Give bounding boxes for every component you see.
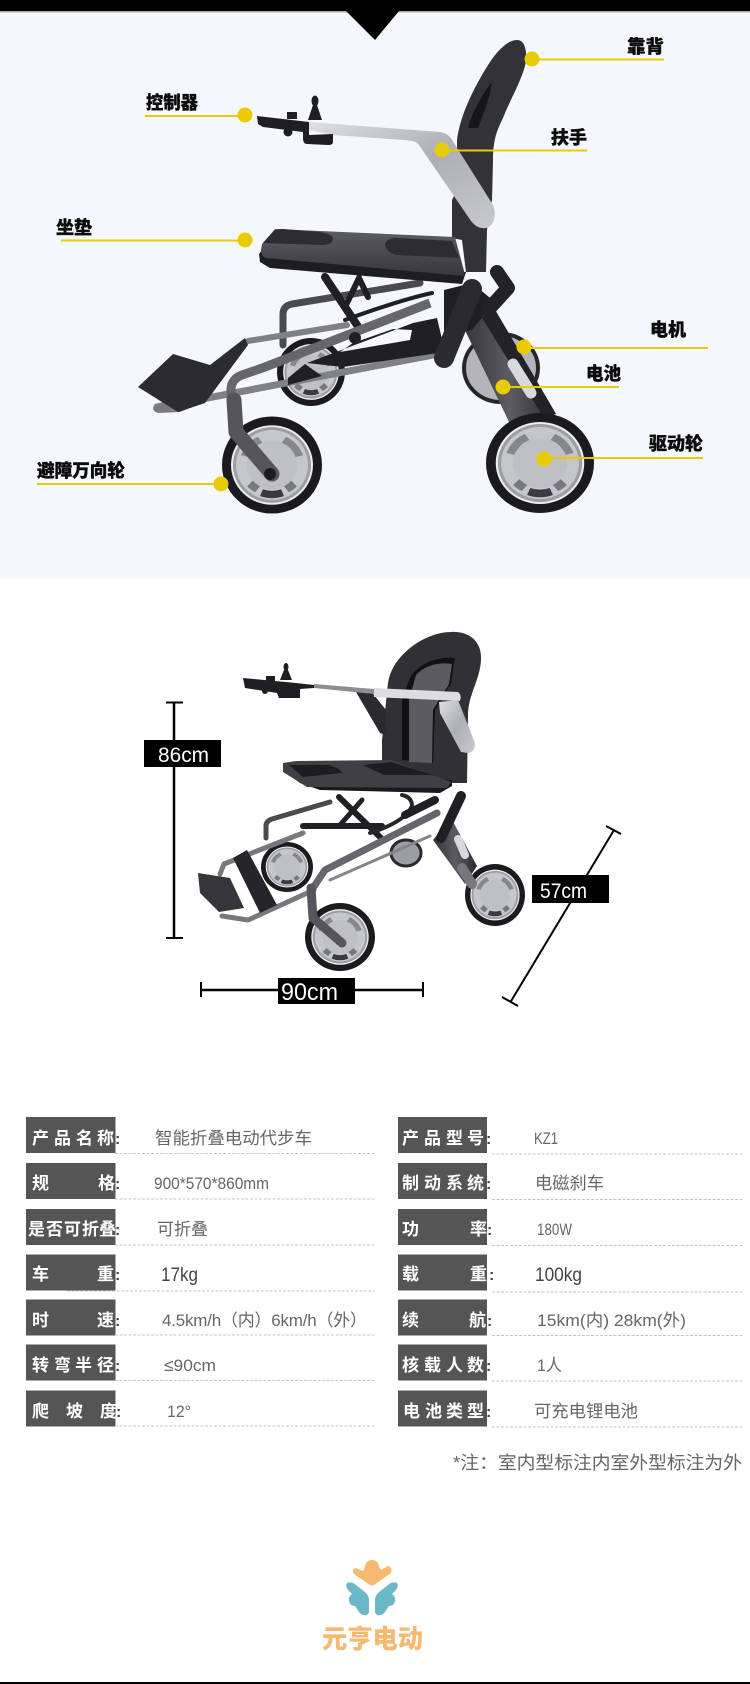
front arm bracket [356, 690, 386, 735]
width dimension 90cm: 90cm [281, 979, 338, 1006]
row: 电池类型: 电池类型 [403, 1402, 484, 1421]
row: 转弯半径: : [115, 1358, 120, 1375]
depth dimension 57cm: 57cm [540, 880, 587, 903]
front wheel [305, 903, 375, 971]
row: 续航: 续航 [402, 1310, 486, 1330]
upper frame [266, 795, 435, 838]
row: 时速: 4.5km/h（内）6km/h（外） [162, 1311, 367, 1330]
panel: dimensions diagram [144, 632, 621, 1006]
row: 产品名称 [26, 1117, 375, 1154]
footrest plate and strap [198, 850, 277, 913]
depth dimension 57cm [502, 826, 621, 1006]
battery cover [513, 364, 531, 393]
row: 制动系统: : [486, 1176, 491, 1193]
footrest loop tube [220, 833, 314, 920]
left small wheel [261, 842, 313, 892]
panel: specification table [26, 1117, 743, 1427]
row: 载重: 载重 [402, 1265, 487, 1284]
row: 功率: 功率 [402, 1219, 487, 1239]
row: 是否可折叠: : [115, 1222, 120, 1239]
row: 续航 [398, 1300, 743, 1336]
row: 车重: 车重 [32, 1264, 114, 1284]
row: 核载人数: 核载人数 [402, 1355, 484, 1375]
row: 转弯半径: ≤90cm [164, 1356, 216, 1375]
callout: 驱动轮: 驱动轮 [649, 433, 703, 454]
row: 电池类型 [398, 1390, 743, 1427]
callout: 靠背 [524, 36, 664, 66]
row: 是否可折叠 [26, 1209, 375, 1245]
row: 制动系统: 制动系统 [402, 1173, 484, 1193]
row: 制动系统: 电磁刹车 [535, 1174, 604, 1193]
wheelchair three-quarter view [198, 632, 525, 971]
callout: 坐垫: 坐垫 [56, 218, 92, 238]
callout: 控制器 [145, 92, 252, 122]
row: 产品型号: KZ1 [534, 1129, 558, 1148]
row: 是否可折叠: 是否可折叠 [28, 1220, 116, 1239]
armrest [314, 684, 475, 753]
row: 产品名称: : [115, 1131, 120, 1148]
row: 规格: 规格 [32, 1174, 115, 1193]
row: 制动系统 [398, 1163, 743, 1200]
main tubes and fork [313, 813, 437, 888]
row: 爬坡度: 12° [167, 1402, 191, 1421]
width dimension 90cm [201, 978, 423, 1006]
downward triangle marker [346, 11, 399, 40]
row: 规格 [26, 1163, 375, 1199]
row: 爬坡度 [26, 1390, 375, 1426]
row: 车重: 17kg [161, 1265, 198, 1286]
row: 产品型号: 产品型号 [402, 1129, 484, 1148]
row: 功率: 180W [537, 1220, 572, 1239]
backrest [452, 40, 526, 272]
row: 转弯半径 [26, 1344, 375, 1380]
callout: 电机: 电机 [650, 319, 686, 340]
logo wordmark: 元亨电动 [322, 1624, 423, 1654]
seat [259, 229, 466, 284]
row: 电池类型: 可充电锂电池 [534, 1402, 638, 1421]
scissor links [325, 277, 432, 328]
row: 载重: : [489, 1267, 494, 1284]
row: 规格: : [115, 1176, 120, 1193]
panel: labelled wheelchair diagram [0, 0, 750, 578]
logo icon [346, 1560, 398, 1615]
black folding frame [307, 318, 445, 367]
seat [283, 760, 452, 793]
callout: 避障万向轮 [37, 460, 228, 492]
row: 时速 [26, 1300, 375, 1336]
backrest [382, 632, 481, 783]
row: 核载人数: 1人 [537, 1356, 562, 1375]
front caster wheel [222, 416, 322, 514]
row: 时速: : [115, 1313, 120, 1330]
callout: 电池 [496, 364, 621, 394]
drive wheel [486, 413, 594, 513]
row: 是否可折叠: 可折叠 [157, 1220, 208, 1239]
callout: 电机 [516, 319, 708, 354]
row: 产品名称: 智能折叠电动代步车 [155, 1129, 312, 1148]
logo [322, 1560, 423, 1654]
row: 车重 [26, 1254, 375, 1291]
height dimension 86cm [144, 702, 221, 938]
row: 时速: 时速 [32, 1311, 114, 1330]
bottom black bar [0, 1682, 750, 1684]
row: 核载人数 [398, 1344, 743, 1381]
controller and joystick [257, 96, 333, 145]
callout: 扶手 [434, 127, 587, 158]
wheelchair side view [138, 40, 594, 514]
row: 核载人数: : [486, 1358, 491, 1375]
row: 爬坡度: 爬坡度 [32, 1401, 117, 1421]
row: 功率: : [487, 1222, 492, 1239]
callout: 驱动轮 [536, 433, 703, 466]
row: 转弯半径: 转弯半径 [32, 1355, 114, 1375]
rear leg and battery cover [433, 818, 477, 884]
height dimension 86cm: 86cm [158, 744, 209, 767]
rear far wheel [464, 334, 538, 402]
row: 规格: 900*570*860mm [154, 1174, 269, 1193]
row: 产品型号: : [486, 1131, 491, 1148]
callout: 扶手: 扶手 [551, 127, 587, 148]
row: 电池类型: : [486, 1404, 491, 1421]
callout: 避障万向轮: 避障万向轮 [37, 460, 125, 481]
armrest [309, 122, 495, 228]
rear handle [441, 796, 461, 838]
callout: 靠背: 靠背 [627, 36, 664, 57]
row: 载重 [398, 1254, 743, 1292]
rear leg [463, 308, 556, 424]
upper frame tubes [202, 283, 433, 399]
row: 功率 [398, 1209, 743, 1246]
row: 产品型号 [398, 1117, 743, 1154]
back far wheel [391, 840, 421, 866]
top black bar [0, 0, 750, 12]
rear wheel [465, 864, 525, 926]
callout: 控制器: 控制器 [146, 92, 198, 113]
callout: 电池: 电池 [586, 364, 621, 384]
row: 载重: 100kg [535, 1265, 582, 1286]
diagonal main tube and fork [231, 303, 430, 432]
far small wheel [277, 338, 345, 406]
row: 续航: 15km(内) 28km(外) [537, 1311, 686, 1330]
caster fork [234, 400, 272, 474]
row: 爬坡度: : [116, 1404, 121, 1421]
row: 产品名称: 产品名称 [32, 1129, 114, 1148]
callout: 坐垫 [56, 218, 252, 248]
row: 车重: : [115, 1267, 120, 1284]
rear column and handle [444, 272, 508, 358]
footnote: *注：室内型标注内室外型标注为外 [453, 1453, 742, 1473]
row: 续航: : [487, 1313, 492, 1330]
footrest [138, 338, 248, 413]
controller and joystick [243, 663, 314, 698]
